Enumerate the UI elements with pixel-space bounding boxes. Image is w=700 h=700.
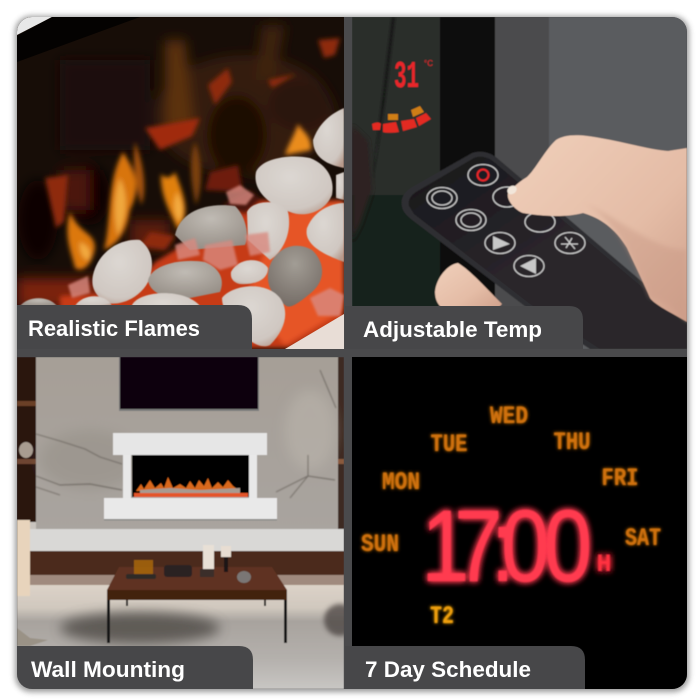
- tv: [119, 357, 259, 411]
- day labels: THU: [554, 428, 590, 457]
- clock digits: [422, 504, 616, 588]
- label: wall mounting: Wall Mounting: [31, 657, 185, 682]
- remote control: [401, 152, 687, 349]
- clock digits: H: [596, 550, 612, 579]
- day labels: SUN: [361, 530, 399, 559]
- remote buttons: [427, 164, 585, 276]
- panel: realistic flames photo: [17, 17, 344, 349]
- day labels: TUE: [430, 430, 468, 459]
- flames: [67, 124, 311, 270]
- hand: [508, 135, 687, 322]
- label: realistic flames: [17, 305, 252, 349]
- day labels: FRI: [602, 464, 638, 493]
- bright floor: [285, 314, 344, 349]
- panel: wall mounting photo: [17, 357, 356, 689]
- sofa arm: [17, 520, 30, 596]
- day labels: SAT: [625, 524, 661, 553]
- label: 7 day schedule: 7 Day Schedule: [365, 657, 531, 682]
- label: wall mounting: [17, 646, 253, 689]
- ember bed: [60, 190, 344, 348]
- temperature readout: [372, 56, 433, 133]
- day labels: [361, 402, 661, 631]
- day labels: WED: [490, 402, 528, 431]
- temperature readout: 31: [394, 56, 419, 99]
- temperature readout: °C: [424, 59, 433, 68]
- stone wall: [36, 357, 338, 529]
- shelving: [17, 357, 36, 522]
- day labels: MON: [382, 468, 420, 497]
- bench: [30, 529, 344, 551]
- thumb: [435, 263, 502, 310]
- rug: [17, 584, 344, 678]
- label: realistic flames: Realistic Flames: [28, 316, 200, 341]
- table decor: [134, 560, 153, 575]
- wall fireplace: [104, 433, 277, 520]
- pebbles: [20, 108, 344, 346]
- coffee table: [107, 545, 287, 643]
- label: adjustable temp: [345, 306, 583, 349]
- panel: adjustable temp photo: [352, 17, 687, 349]
- day labels: T2: [430, 602, 454, 631]
- panel: 7 day schedule display: [352, 357, 687, 689]
- glass crystals: [68, 185, 344, 316]
- clock digits: 17:00: [421, 490, 592, 604]
- glowing ember crumbs: [45, 38, 340, 250]
- label: adjustable temp: Adjustable Temp: [363, 317, 542, 342]
- label: 7 day schedule: [345, 646, 585, 689]
